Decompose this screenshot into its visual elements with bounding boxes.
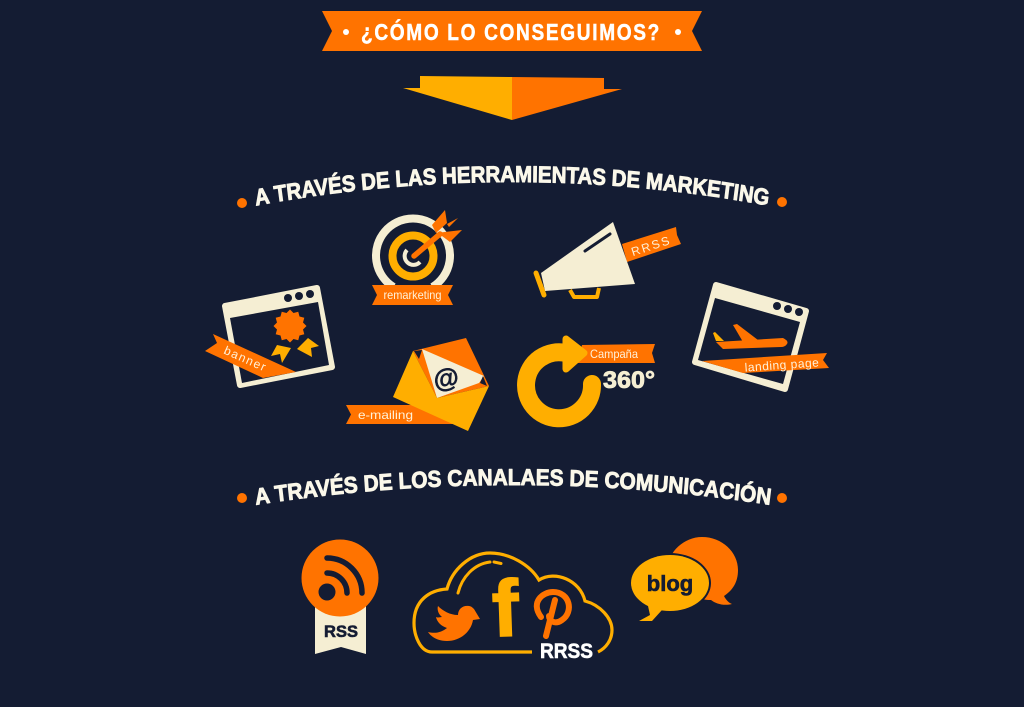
icon: target remarketing (372, 210, 462, 305)
icon: envelope e-mailing (346, 338, 489, 431)
icon: campaign 360: 360° (603, 367, 655, 394)
icon: pinterest p (537, 592, 569, 636)
arrow down (403, 76, 622, 120)
badge (271, 310, 319, 363)
icon: blog speech bubbles (629, 537, 738, 621)
arrow in target (414, 210, 462, 256)
title banner (322, 11, 702, 51)
icon: RSS badge: RSS (324, 623, 358, 641)
icon: envelope e-mailing: @ (431, 361, 461, 395)
airplane (713, 324, 788, 349)
icon: landing page window (695, 285, 829, 389)
icon: RSS badge (302, 540, 378, 654)
icon: campaign 360 (526, 339, 655, 418)
ribbon: RRSS: RRSS (629, 233, 673, 259)
heading: marketing tools: A TRAVÉS DE LAS HERRAMIENTAS DE MARKETING (256, 166, 769, 206)
icon: social cloud (414, 553, 612, 663)
ribbon: RRSS (622, 227, 681, 262)
ribbon: banner: banner (222, 343, 269, 375)
label: RRSS: RRSS (540, 640, 593, 663)
heading: communication channels: A TRAVÉS DE LOS CANALAES DE COMUNICACIÓN (256, 468, 772, 506)
ribbon: e-mailing: e-mailing (358, 408, 413, 422)
icon: facebook f: f (491, 564, 521, 653)
ribbon: remarketing: remarketing (384, 288, 442, 302)
title banner: ¿CÓMO LO CONSEGUIMOS? (361, 18, 661, 45)
icon: blog speech bubbles: blog (647, 571, 693, 596)
icon: banner window (205, 288, 332, 385)
icon: twitter bird (428, 606, 480, 641)
ribbon: e-mailing (346, 405, 457, 424)
ribbon: Campaña: Campaña (590, 347, 638, 361)
ribbon: landing page: landing page (744, 355, 820, 375)
icon: megaphone RRSS (536, 222, 681, 297)
